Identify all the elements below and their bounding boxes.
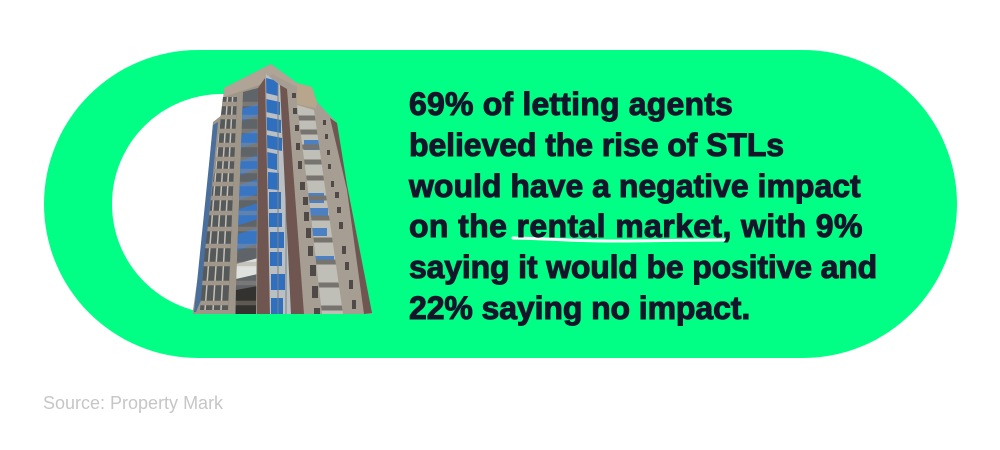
image: apartment tower [193, 64, 372, 314]
white cut-out behind building [112, 94, 262, 314]
column of windows 2 with blue balconies [235, 88, 258, 314]
tower silhouette: right wall [262, 64, 372, 314]
left side edge balconies [194, 122, 218, 312]
main statement text: 22% saying no impact. [409, 290, 750, 326]
main statement text: would have a negative impact [409, 168, 861, 204]
main statement text [408, 86, 877, 326]
right wall windows [323, 120, 356, 309]
main statement text: believed the rise of STLs [409, 127, 784, 163]
main statement text: on the rental market, with 9% [409, 208, 863, 244]
column of windows 1 [200, 97, 237, 310]
beige wall windows [292, 93, 320, 314]
tower silhouette: left wall [193, 64, 271, 314]
source note: Source: Property Mark [43, 393, 223, 413]
panel: green pill background [44, 50, 957, 358]
main statement text: 69% of letting agents [409, 86, 733, 122]
brown stripe right edge [330, 118, 372, 314]
roof cap [224, 64, 297, 97]
round tower top [297, 83, 317, 108]
brown vertical stripe centre [280, 85, 304, 314]
brown vertical stripe left [257, 78, 270, 314]
main statement text: saying it would be positive and [409, 249, 877, 285]
curved balcony column [297, 105, 343, 314]
central blue balcony column [266, 74, 291, 314]
